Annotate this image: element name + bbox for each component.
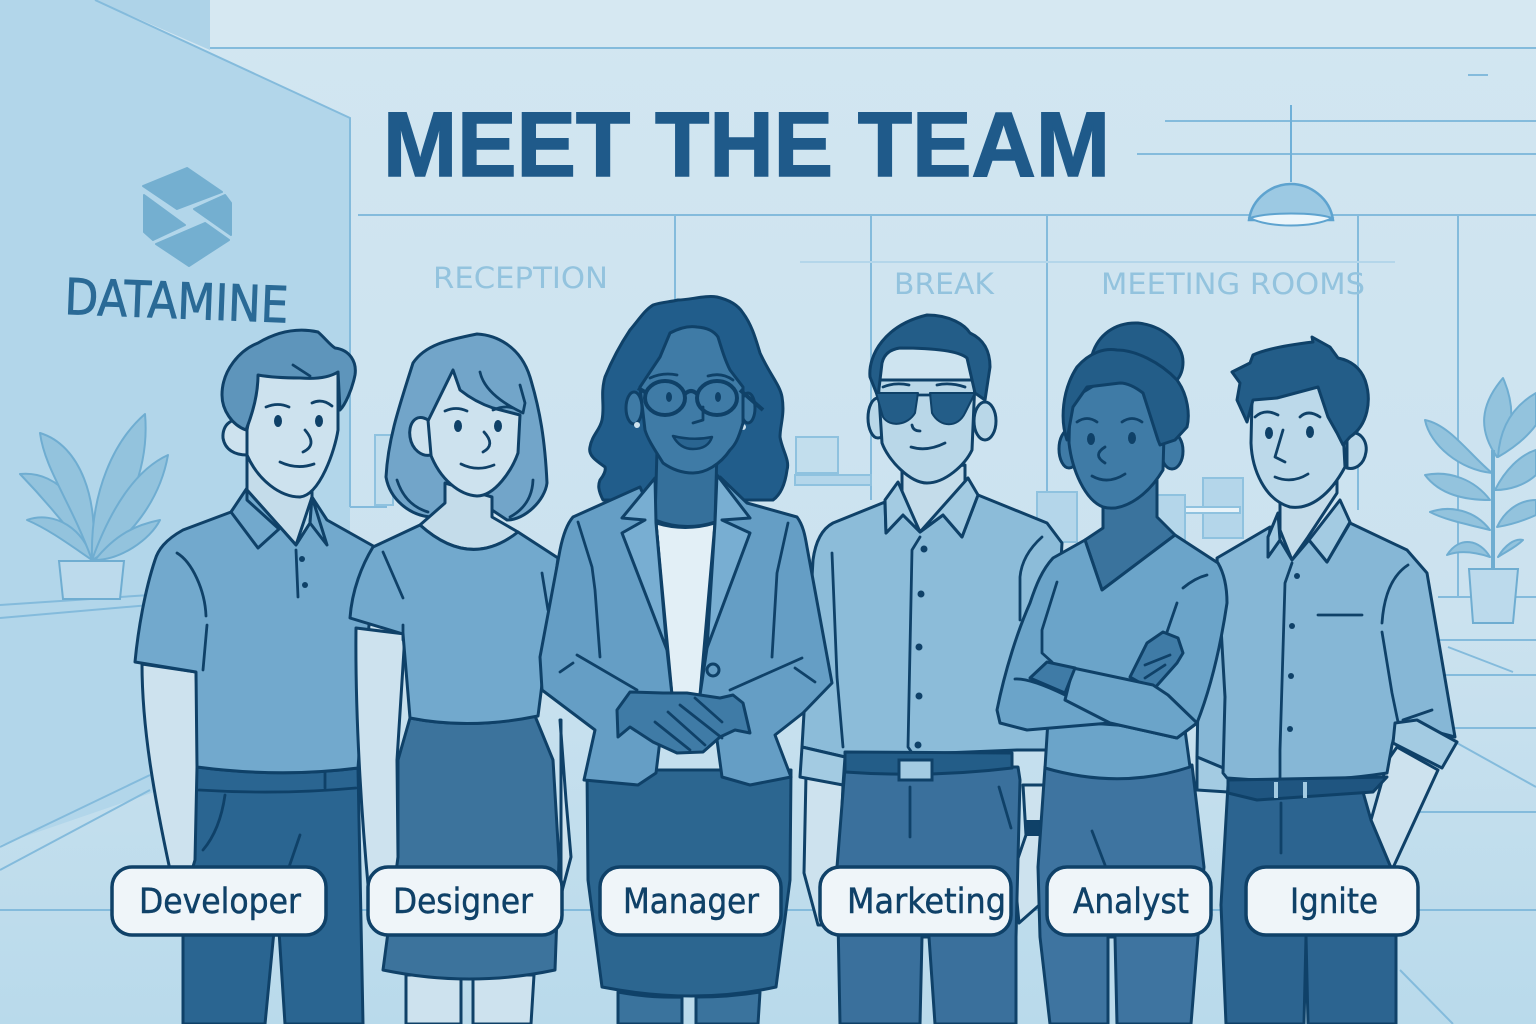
arms	[804, 775, 843, 925]
hair	[590, 297, 788, 500]
blazer right	[700, 477, 832, 785]
trousers	[837, 767, 1020, 1024]
hair	[386, 334, 547, 520]
label: designer: Designer	[393, 882, 534, 922]
neck	[902, 465, 965, 532]
label: manager: Manager	[623, 882, 760, 922]
skirt	[383, 716, 559, 979]
lapels	[622, 478, 667, 650]
belt	[1228, 777, 1387, 800]
forearm	[1065, 668, 1197, 738]
sunglasses	[876, 393, 975, 424]
trousers	[183, 767, 363, 1024]
face	[878, 380, 975, 483]
office furniture	[375, 435, 1243, 545]
room sign: break: BREAK	[894, 267, 995, 301]
person: designer	[350, 334, 571, 1024]
ears	[1059, 430, 1079, 468]
person: marketing	[800, 315, 1062, 1024]
label: developer	[112, 867, 326, 935]
arm	[1197, 560, 1228, 770]
label: marketing	[820, 867, 1011, 935]
ears	[868, 398, 888, 438]
ear	[223, 420, 247, 455]
belt	[845, 752, 1012, 774]
arm	[142, 664, 205, 870]
bun	[1092, 323, 1183, 390]
forearm	[1371, 747, 1438, 870]
blouse	[656, 523, 715, 695]
label: ignite: Ignite	[1290, 882, 1378, 922]
face	[247, 372, 338, 497]
label: developer: Developer	[139, 882, 302, 922]
icon: logo hexagon	[143, 168, 231, 266]
room sign: meeting rooms: MEETING ROOMS	[1101, 267, 1365, 301]
title: MEET THE TEAM	[383, 94, 1110, 196]
room sign: reception: RECEPTION	[433, 261, 608, 295]
shirt	[135, 490, 375, 773]
label: ignite	[1246, 867, 1418, 935]
trousers	[1038, 765, 1204, 1024]
neck	[420, 483, 518, 549]
hair	[1063, 350, 1188, 445]
cuff	[1393, 720, 1457, 768]
logo wordmark: DATAMINE	[64, 268, 290, 335]
neck	[1280, 480, 1337, 560]
label: analyst: Analyst	[1073, 882, 1189, 922]
collar	[1309, 500, 1350, 562]
hair	[1232, 337, 1368, 445]
sweater body	[1045, 720, 1190, 779]
ears	[626, 392, 642, 424]
shirt	[350, 525, 558, 724]
trousers	[1221, 785, 1396, 1024]
icon: pendant lamp	[1249, 105, 1333, 226]
label: marketing: Marketing	[847, 882, 1006, 922]
face	[1251, 387, 1345, 507]
shirt	[802, 495, 1062, 757]
skirt	[587, 770, 791, 996]
cuff hand	[1030, 662, 1075, 693]
person: developer	[135, 330, 375, 1024]
logo: Datamine	[64, 168, 290, 335]
person: ignite	[1197, 337, 1457, 1024]
label: manager	[600, 867, 781, 935]
hair	[870, 315, 990, 400]
neck	[247, 450, 312, 545]
collar	[231, 488, 279, 548]
neck	[655, 450, 717, 527]
glasses	[638, 381, 763, 415]
hand	[1130, 632, 1183, 690]
ear	[410, 418, 431, 455]
icon: right plant	[1425, 378, 1536, 623]
person: analyst	[997, 323, 1227, 1024]
arm	[356, 628, 418, 925]
blazer left	[540, 487, 672, 785]
hair	[222, 330, 355, 430]
face	[1069, 370, 1165, 508]
label: designer	[368, 867, 562, 935]
collar	[885, 482, 920, 533]
hands	[617, 692, 750, 753]
label: analyst	[1047, 867, 1211, 935]
face	[427, 370, 520, 496]
ear	[1347, 433, 1366, 468]
left wall	[0, 0, 387, 870]
cuff	[800, 747, 845, 785]
face	[640, 327, 743, 473]
icon: left plant	[20, 414, 168, 599]
shirt	[1217, 523, 1455, 781]
legs	[618, 992, 760, 1024]
facial features	[274, 415, 282, 427]
neck	[1085, 480, 1175, 590]
person: manager	[540, 297, 832, 1024]
sweater	[997, 535, 1227, 738]
